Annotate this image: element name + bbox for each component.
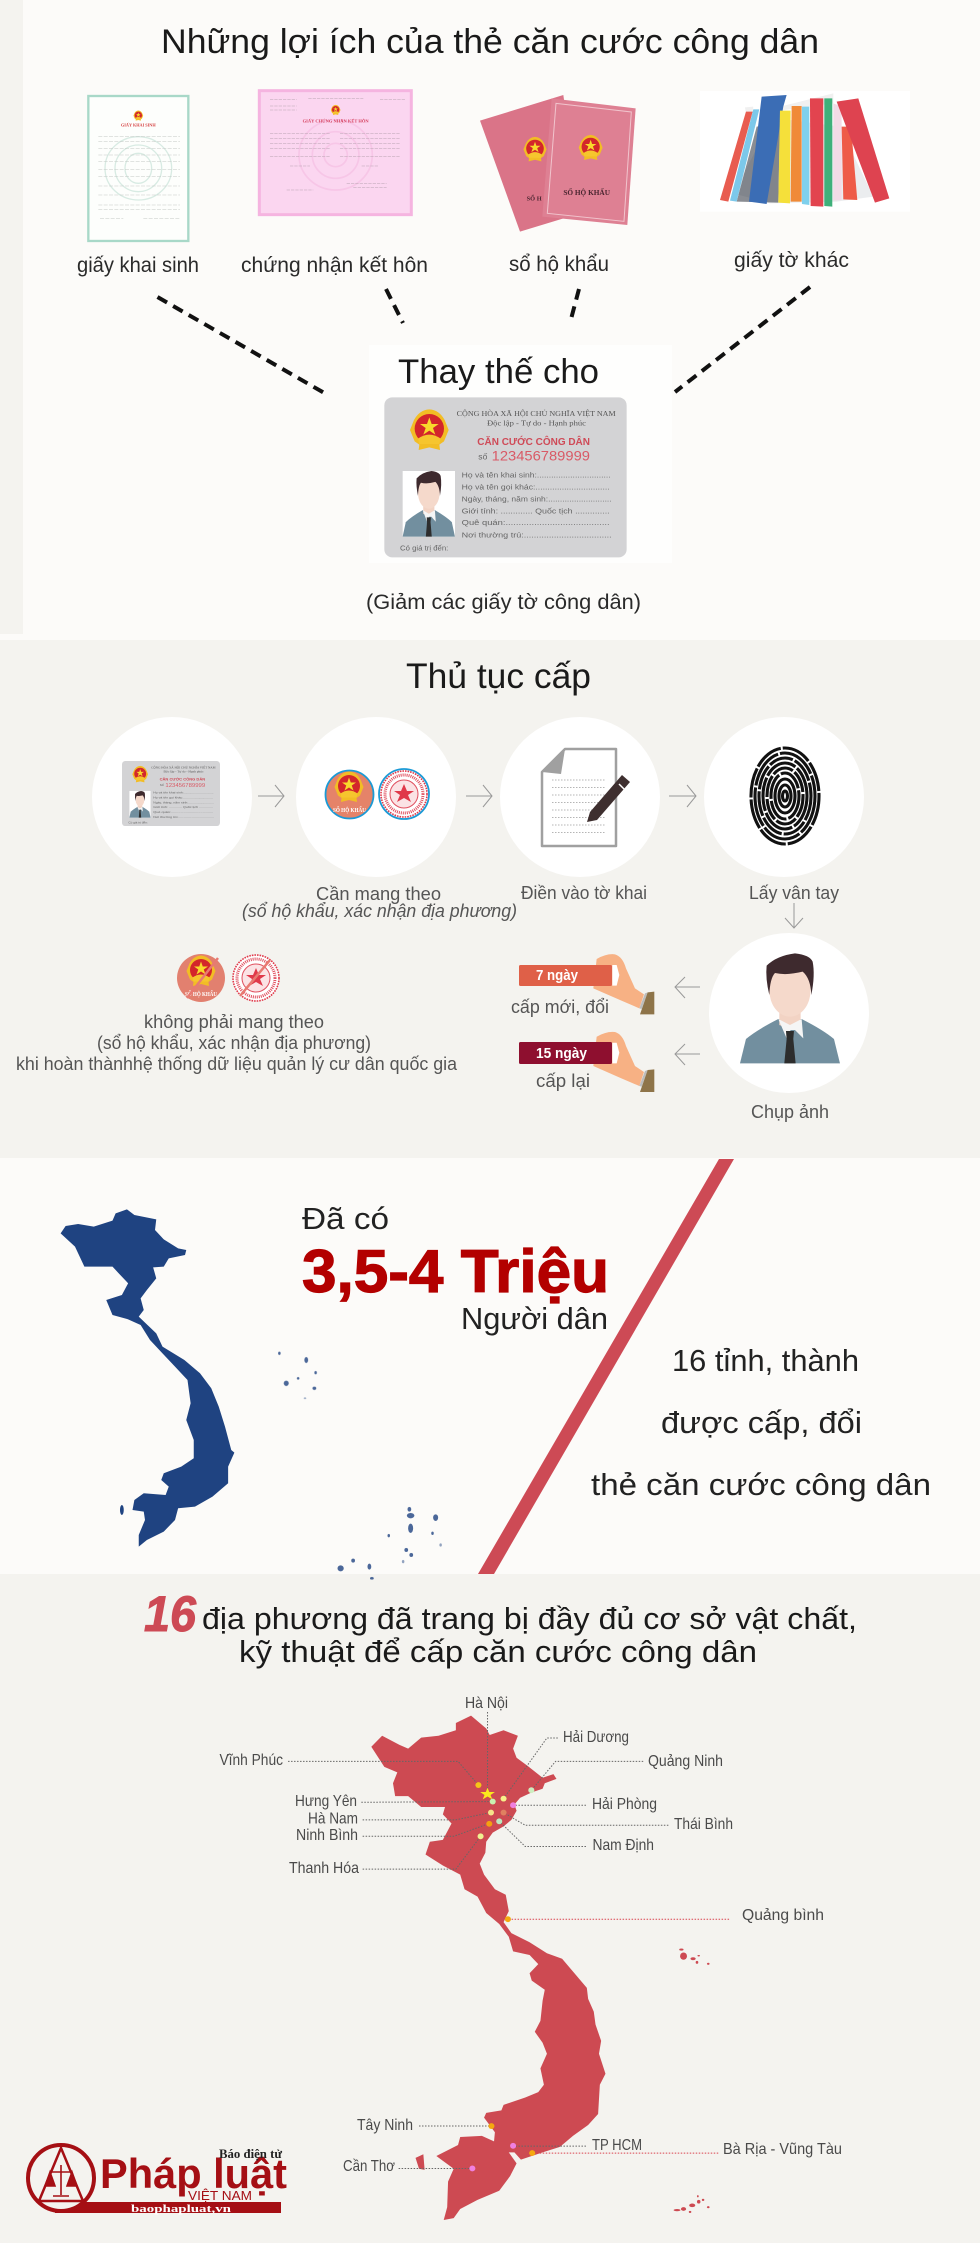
panel: localities map (28, 1586, 857, 2220)
map labels: Tây Ninh (357, 2117, 413, 2134)
map labels: Hưng Yên (295, 1793, 357, 1810)
text: people: Người dân (461, 1301, 608, 1336)
callout: 15 days: 15 ngày (536, 1045, 588, 1062)
dashed connectors (158, 287, 810, 394)
location markers (469, 1782, 535, 2171)
icon: birth certificate (88, 96, 188, 241)
icon: small id card (122, 761, 220, 826)
logo: Pháp luật Việt Nam (28, 2145, 287, 2215)
icon: household registration books: SỔ H (527, 195, 542, 203)
map labels: Nam Định (592, 1837, 654, 1854)
icon: stack of books (700, 91, 910, 212)
text: step captions (242, 883, 839, 1122)
callout: 7 days: 7 ngày (536, 967, 579, 984)
icon: household registration books: SỔ HỘ KHẨU (563, 187, 611, 197)
title: Những lợi ích của thẻ căn cước công dân (161, 23, 819, 61)
panel: statistics (0, 1158, 980, 1580)
map: Vietnam in blue (61, 1209, 442, 1580)
map labels: Cần Thơ (343, 2158, 395, 2175)
map labels (220, 1695, 842, 2175)
text: step captions: Điền vào tờ khai (521, 883, 647, 903)
callout: 7 days: cấp mới, đổi (511, 997, 609, 1017)
arrows (258, 785, 803, 1065)
text: provinces: thẻ căn cước công dân (591, 1467, 931, 1502)
icon: marriage certificate: GIẤY CHỨNG NHẬN KẾT HÔN (303, 118, 370, 123)
map labels: Thái Bình (674, 1816, 733, 1833)
icon: portrait (740, 953, 840, 1063)
map labels: TP HCM (592, 2137, 642, 2154)
logo: Pháp luật Việt Nam: Pháp luật (100, 2150, 287, 2197)
heading: replaces: Thay thế cho (398, 353, 599, 391)
icon: crossed out documents (177, 954, 279, 1002)
text: step captions: Cần mang theo (316, 884, 441, 904)
icon: marriage certificate (259, 91, 411, 215)
logo: Pháp luật Việt Nam: Báo điện tử (219, 2146, 282, 2161)
icon: household book and stamp (326, 769, 429, 819)
text: provinces (591, 1343, 931, 1502)
text: step captions: Lấy vân tay (749, 883, 839, 903)
icon: citizen id card (384, 397, 627, 557)
panel: procedure (0, 640, 980, 1158)
heading: sixteen localities: địa phương đã trang bị đầy đủ cơ sở vật chất, (202, 1601, 857, 1636)
panel: id card highlight (369, 345, 672, 563)
text: not required note: khi hoàn thànhhệ thống dữ liệu quản lý cư dân quốc gia (16, 1054, 458, 1074)
icon: fingerprint (751, 748, 819, 844)
map labels: Quảng bình (742, 1907, 824, 1924)
text: not required note: không phải mang theo (144, 1012, 324, 1032)
text: provinces: được cấp, đổi (661, 1405, 862, 1440)
map labels: Vĩnh Phúc (220, 1752, 283, 1769)
logo: Pháp luật Việt Nam: baophapluat,vn (131, 2203, 231, 2215)
icon: crossed out documents: SỔ HỘ KHẨU (185, 990, 217, 998)
heading: sixteen localities: kỹ thuật để cấp căn cước công dân (239, 1634, 757, 1669)
leader lines (288, 1712, 729, 2168)
icon: form and pen (542, 749, 630, 846)
callout: 15 days: cấp lại (536, 1071, 590, 1091)
text: other documents label: giấy tờ khác (734, 249, 849, 272)
icon: household registration books (480, 95, 636, 232)
map labels: Hải Phòng (592, 1796, 657, 1813)
text: household label: sổ hộ khẩu (509, 253, 609, 276)
heading: sixteen localities: 16 (144, 1586, 197, 1642)
map labels: Quảng Ninh (648, 1753, 723, 1770)
text: already: Đã có (302, 1201, 389, 1236)
heading: sixteen localities (144, 1586, 857, 1669)
text: not required note: (sổ hộ khẩu, xác nhận địa phương) (97, 1033, 371, 1053)
text: step captions: (sổ hộ khẩu, xác nhận địa phương) (242, 901, 517, 921)
map labels: Ninh Bình (296, 1827, 358, 1844)
divider: red diagonal (478, 1159, 734, 1574)
text: reduce documents: (Giảm các giấy tờ công dân) (366, 591, 641, 614)
panel: benefits background (0, 0, 980, 640)
map: Vietnam in red (288, 1712, 729, 2220)
map labels: Hải Dương (563, 1729, 629, 1746)
callout: 7 days (511, 954, 654, 1017)
text: marriage label: chứng nhận kết hôn (241, 254, 428, 277)
icon: household book and stamp: SỔ HỘ KHẨU (333, 806, 366, 814)
map labels: Thanh Hóa (289, 1860, 359, 1877)
map labels: Hà Nam (308, 1810, 358, 1828)
text: provinces: 16 tỉnh, thành (672, 1343, 859, 1378)
callout: 15 days (519, 1032, 654, 1092)
text: step captions: Chụp ảnh (751, 1102, 829, 1122)
text: not required note (16, 1012, 458, 1074)
panel: benefits content (77, 23, 910, 614)
logo: Pháp luật Việt Nam: VIỆT NAM (188, 2188, 252, 2203)
heading: procedure: Thủ tục cấp (406, 657, 591, 696)
map labels: Bà Rịa - Vũng Tàu (723, 2141, 842, 2158)
icon: birth certificate: GIẤY KHAI SINH (121, 123, 156, 128)
map labels: Hà Nội (465, 1695, 508, 1712)
text: big number: 3,5-4 Triệu (302, 1238, 609, 1305)
step circles (92, 717, 869, 1093)
text: birth certificate label: giấy khai sinh (77, 254, 199, 277)
